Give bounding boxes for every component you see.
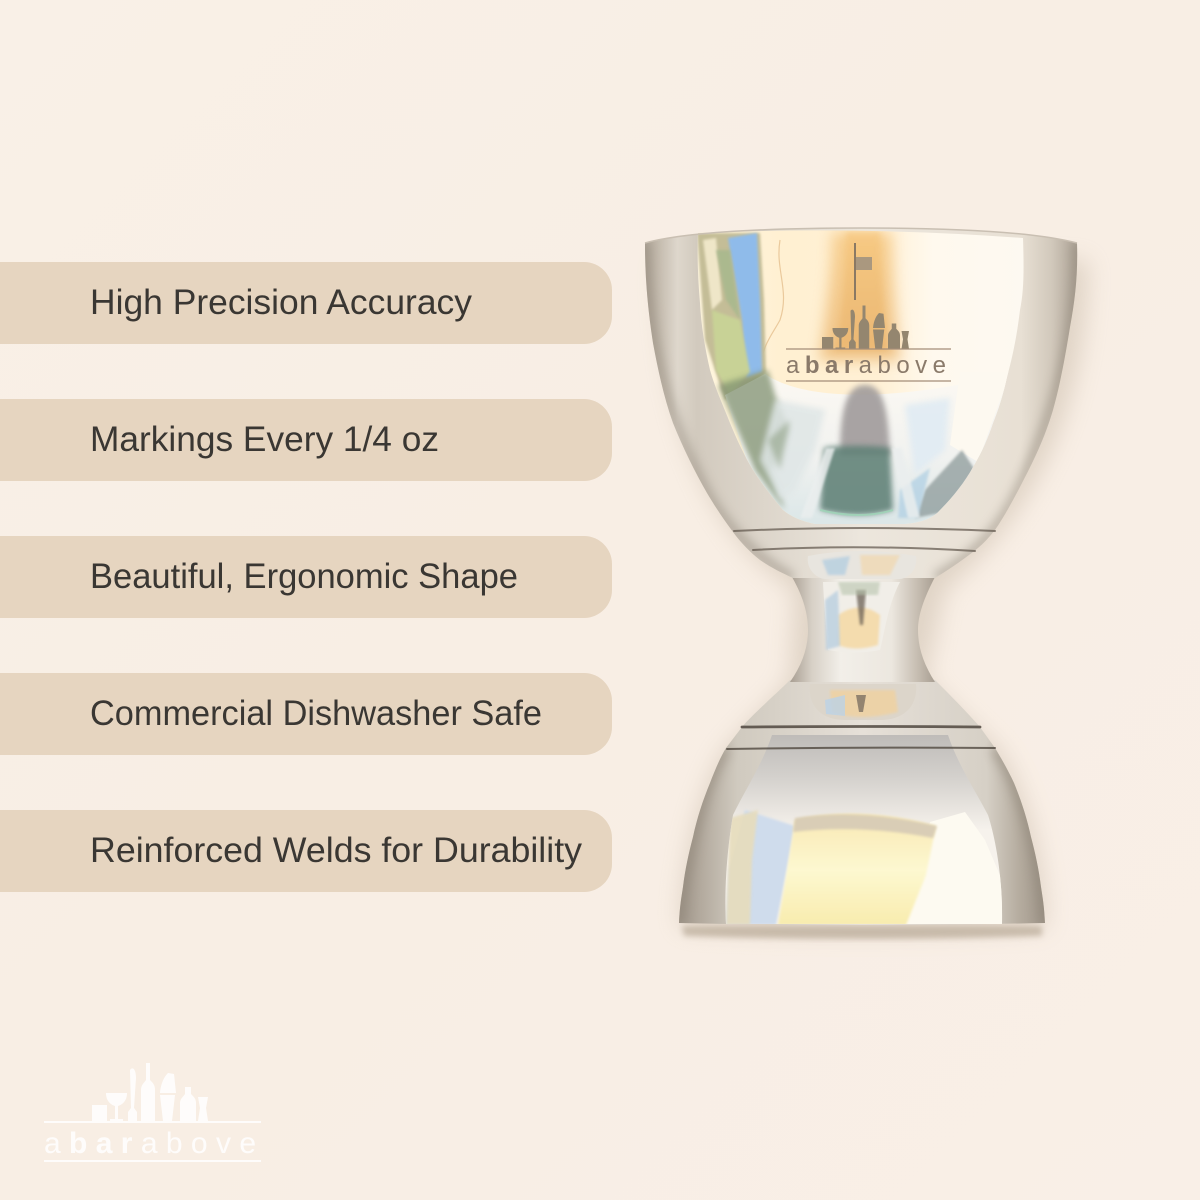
- feature pill: Reinforced Welds for Durability: [0, 810, 612, 892]
- engraved logo on cup: abarabove: [786, 352, 946, 379]
- cup reflection: [690, 225, 1030, 535]
- neck: [790, 577, 935, 682]
- logo wordmark: a bar above: [44, 1127, 256, 1160]
- feature pill: Beautiful, Ergonomic Shape: [0, 536, 612, 618]
- logo: A Bar Above: [44, 1063, 261, 1162]
- feature pill: Reinforced Welds for Durability: Reinforced Welds for Durability: [90, 831, 583, 870]
- jigger shadow: [660, 260, 1088, 933]
- feature pill: High Precision Accuracy: [0, 262, 612, 344]
- bottom cup grooves: [727, 680, 995, 749]
- panel: feature list: [0, 262, 612, 892]
- top cup: [645, 225, 1077, 579]
- rim highlight: [645, 228, 1077, 243]
- logo rules: [44, 1121, 261, 1162]
- bottom collar bulge: [810, 684, 916, 720]
- feature pill: Commercial Dishwasher Safe: Commercial Dishwasher Safe: [90, 694, 542, 733]
- feature pill: Beautiful, Ergonomic Shape: Beautiful, Ergonomic Shape: [90, 557, 518, 596]
- feature pill: Commercial Dishwasher Safe: [0, 673, 612, 755]
- base contact shadow: [682, 926, 1042, 939]
- logo bottle silhouettes: [92, 1063, 208, 1121]
- feature pill: Markings Every 1/4 oz: Markings Every 1/4 oz: [90, 420, 439, 459]
- bottom cup: [679, 680, 1045, 927]
- top collar bulge: [808, 551, 916, 579]
- engraved logo on cup: [786, 243, 951, 381]
- feature pill: Markings Every 1/4 oz: [0, 399, 612, 481]
- top cup grooves: [734, 528, 995, 551]
- feature pill: High Precision Accuracy: High Precision Accuracy: [90, 283, 472, 322]
- product: double jigger: [645, 225, 1088, 939]
